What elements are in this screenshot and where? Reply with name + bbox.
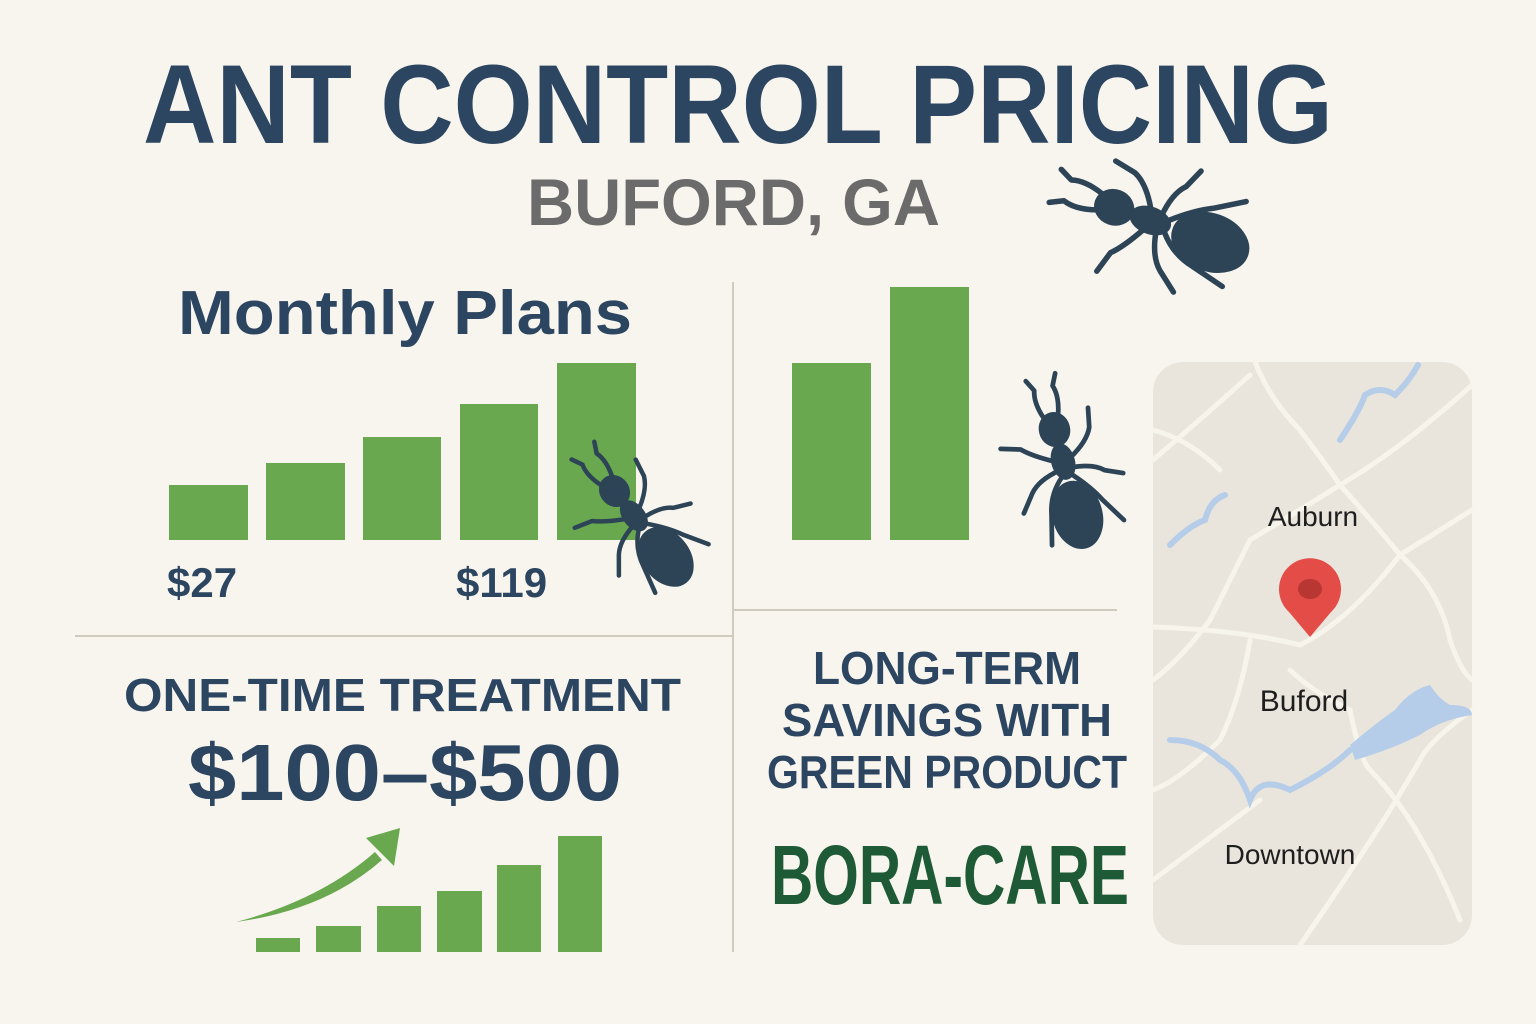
text: long-term savings: LONG-TERM	[813, 642, 1081, 694]
heading: monthly plans: Monthly Plans	[178, 279, 632, 348]
icon: ant top	[1033, 126, 1269, 318]
label: $119: $119	[456, 559, 547, 606]
icon: ant vertical	[985, 363, 1139, 563]
price range: $100–$500	[188, 728, 622, 817]
label: Auburn: Auburn	[1268, 501, 1358, 532]
text: long-term savings: SAVINGS WITH	[782, 694, 1112, 746]
subtitle: BUFORD, GA	[527, 165, 940, 239]
title: ANT CONTROL PRICING	[143, 42, 1333, 167]
text: long-term savings	[767, 642, 1127, 798]
icon: map pin	[1279, 558, 1341, 637]
panel: comparison bars	[792, 287, 1139, 563]
icon: ant on chart	[540, 418, 727, 616]
logo: bora-care: BORA-CARE	[771, 828, 1129, 922]
bar chart: growth	[256, 836, 602, 952]
label: $27: $27	[167, 559, 237, 606]
map	[1153, 362, 1472, 945]
bar chart: monthly	[169, 363, 636, 540]
heading: one-time treatment: ONE-TIME TREATMENT	[124, 669, 681, 721]
label: Downtown: Downtown	[1225, 839, 1355, 870]
label: Buford: Buford	[1260, 685, 1348, 718]
panel: monthly plans	[167, 279, 727, 616]
arrow: growth	[236, 828, 400, 922]
panel: one-time treatment	[124, 669, 681, 952]
bar chart: two bars	[792, 287, 969, 540]
panel: long-term savings	[767, 642, 1129, 922]
text: long-term savings: GREEN PRODUCT	[767, 746, 1127, 798]
